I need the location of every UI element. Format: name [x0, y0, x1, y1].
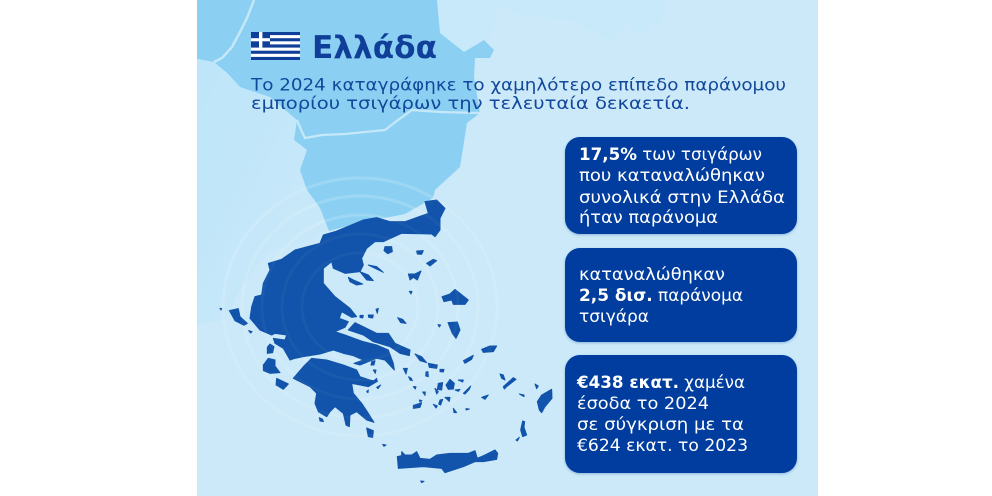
Crete: [397, 450, 498, 473]
title: Ελλάδα: [312, 30, 437, 66]
small islets: [220, 291, 441, 483]
mainland Greece: [250, 200, 445, 370]
Peloponnese: [293, 358, 377, 427]
Kythira: [367, 428, 373, 437]
Sporades: [360, 308, 406, 323]
Lefkada and Kefalonia: [263, 344, 280, 373]
card text: €438 εκατ.: €438 εκατ. χαμένα: [576, 373, 745, 392]
intro text: [250, 76, 786, 114]
panel: card 17,5%: [565, 137, 797, 234]
panel: map background: [197, 0, 818, 496]
card text: 2,5 δισ.: 2,5 δισ. παράνομα: [579, 286, 743, 305]
card text: 17,5%: που καταναλώθηκαν: [579, 166, 765, 185]
card text: €438 εκατ.: [576, 373, 748, 455]
Chalkidiki fingers: [348, 265, 383, 285]
map: concentric rings on sea: [223, 178, 497, 436]
Corfu: [229, 309, 247, 325]
intro text: Το 2024 καταγράφηκε το χαμηλότερο επίπεδο παράνομου: [250, 76, 786, 96]
map: neighbouring countries: [197, 0, 665, 325]
Samos: [482, 346, 497, 352]
card text: 17,5%: [579, 145, 785, 227]
Ikaria: [463, 355, 473, 363]
Chios: [448, 322, 460, 338]
card text: €438 εκατ.: σε σύγκριση με τα: [577, 415, 744, 434]
card text: 17,5%: συνολικά στην Ελλάδα: [579, 188, 785, 207]
map: Greece: [220, 200, 552, 483]
card text: 2,5 δισ.: τσιγάρα: [579, 307, 649, 326]
card text: 17,5%: 17,5% των τσιγάρων: [579, 145, 762, 164]
panel: card €438 εκατ.: [565, 355, 797, 473]
Euboea: [348, 323, 410, 356]
map: rings over land: [223, 178, 497, 436]
Zakynthos: [276, 378, 288, 389]
Dodecanese: [500, 374, 538, 441]
card text: 2,5 δισ.: [579, 265, 743, 326]
Thasos and Samothrace: [384, 247, 437, 266]
intro text: εμπορίου τσιγάρων την τελευταία δεκαετία.: [251, 94, 690, 114]
Rhodes: [537, 389, 552, 413]
Lemnos: [408, 271, 421, 280]
card text: €438 εκατ.: €624 εκατ. το 2023: [577, 436, 748, 455]
Lesbos: [442, 289, 468, 304]
icon: Greek flag: [251, 32, 300, 60]
card text: 17,5%: ήταν παράνομα: [579, 208, 718, 227]
Cyclades: [403, 354, 488, 413]
panel: card 2,5 δισ.: [565, 248, 797, 342]
card text: €438 εκατ.: έσοδα το 2024: [577, 394, 709, 413]
card text: 2,5 δισ.: καταναλώθηκαν: [579, 265, 725, 284]
